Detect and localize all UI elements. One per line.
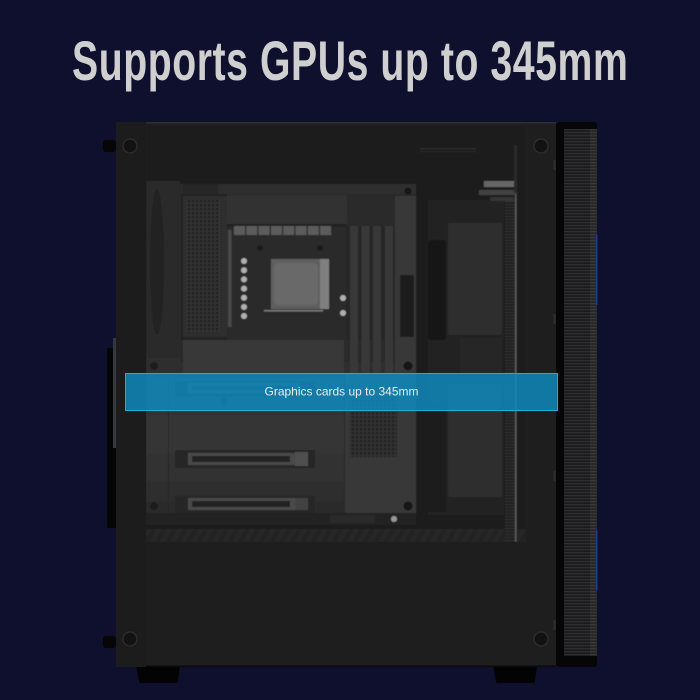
- interior: [146, 125, 526, 542]
- title: Supports GPUs up to 345mm: [72, 30, 628, 93]
- front mesh panel: [556, 122, 598, 667]
- VRM heatsink: [181, 194, 347, 340]
- VRM chokes: [228, 226, 331, 327]
- right side compartment: [416, 184, 504, 529]
- RAM slots: [346, 226, 396, 374]
- side rail behind case: [107, 338, 117, 528]
- fan bracket: [146, 181, 182, 362]
- callout text: Graphics cards up to 345mm: [264, 384, 418, 398]
- PCIe slots: [150, 373, 315, 513]
- motherboard: [146, 184, 416, 513]
- callout band: [126, 374, 558, 410]
- case feet: [136, 666, 537, 683]
- lower heatsink: [146, 340, 416, 513]
- corner screws: [123, 139, 548, 646]
- thumb screw knobs: [103, 140, 116, 648]
- top vent slot: [420, 148, 476, 152]
- case body: [116, 122, 556, 667]
- CPU socket: [257, 245, 329, 312]
- standoff dots: [241, 258, 346, 319]
- bottom board edge: [146, 513, 526, 542]
- ATX power connector: [395, 188, 416, 372]
- case side clips: [553, 160, 556, 630]
- vertical mesh bracket: [479, 145, 517, 542]
